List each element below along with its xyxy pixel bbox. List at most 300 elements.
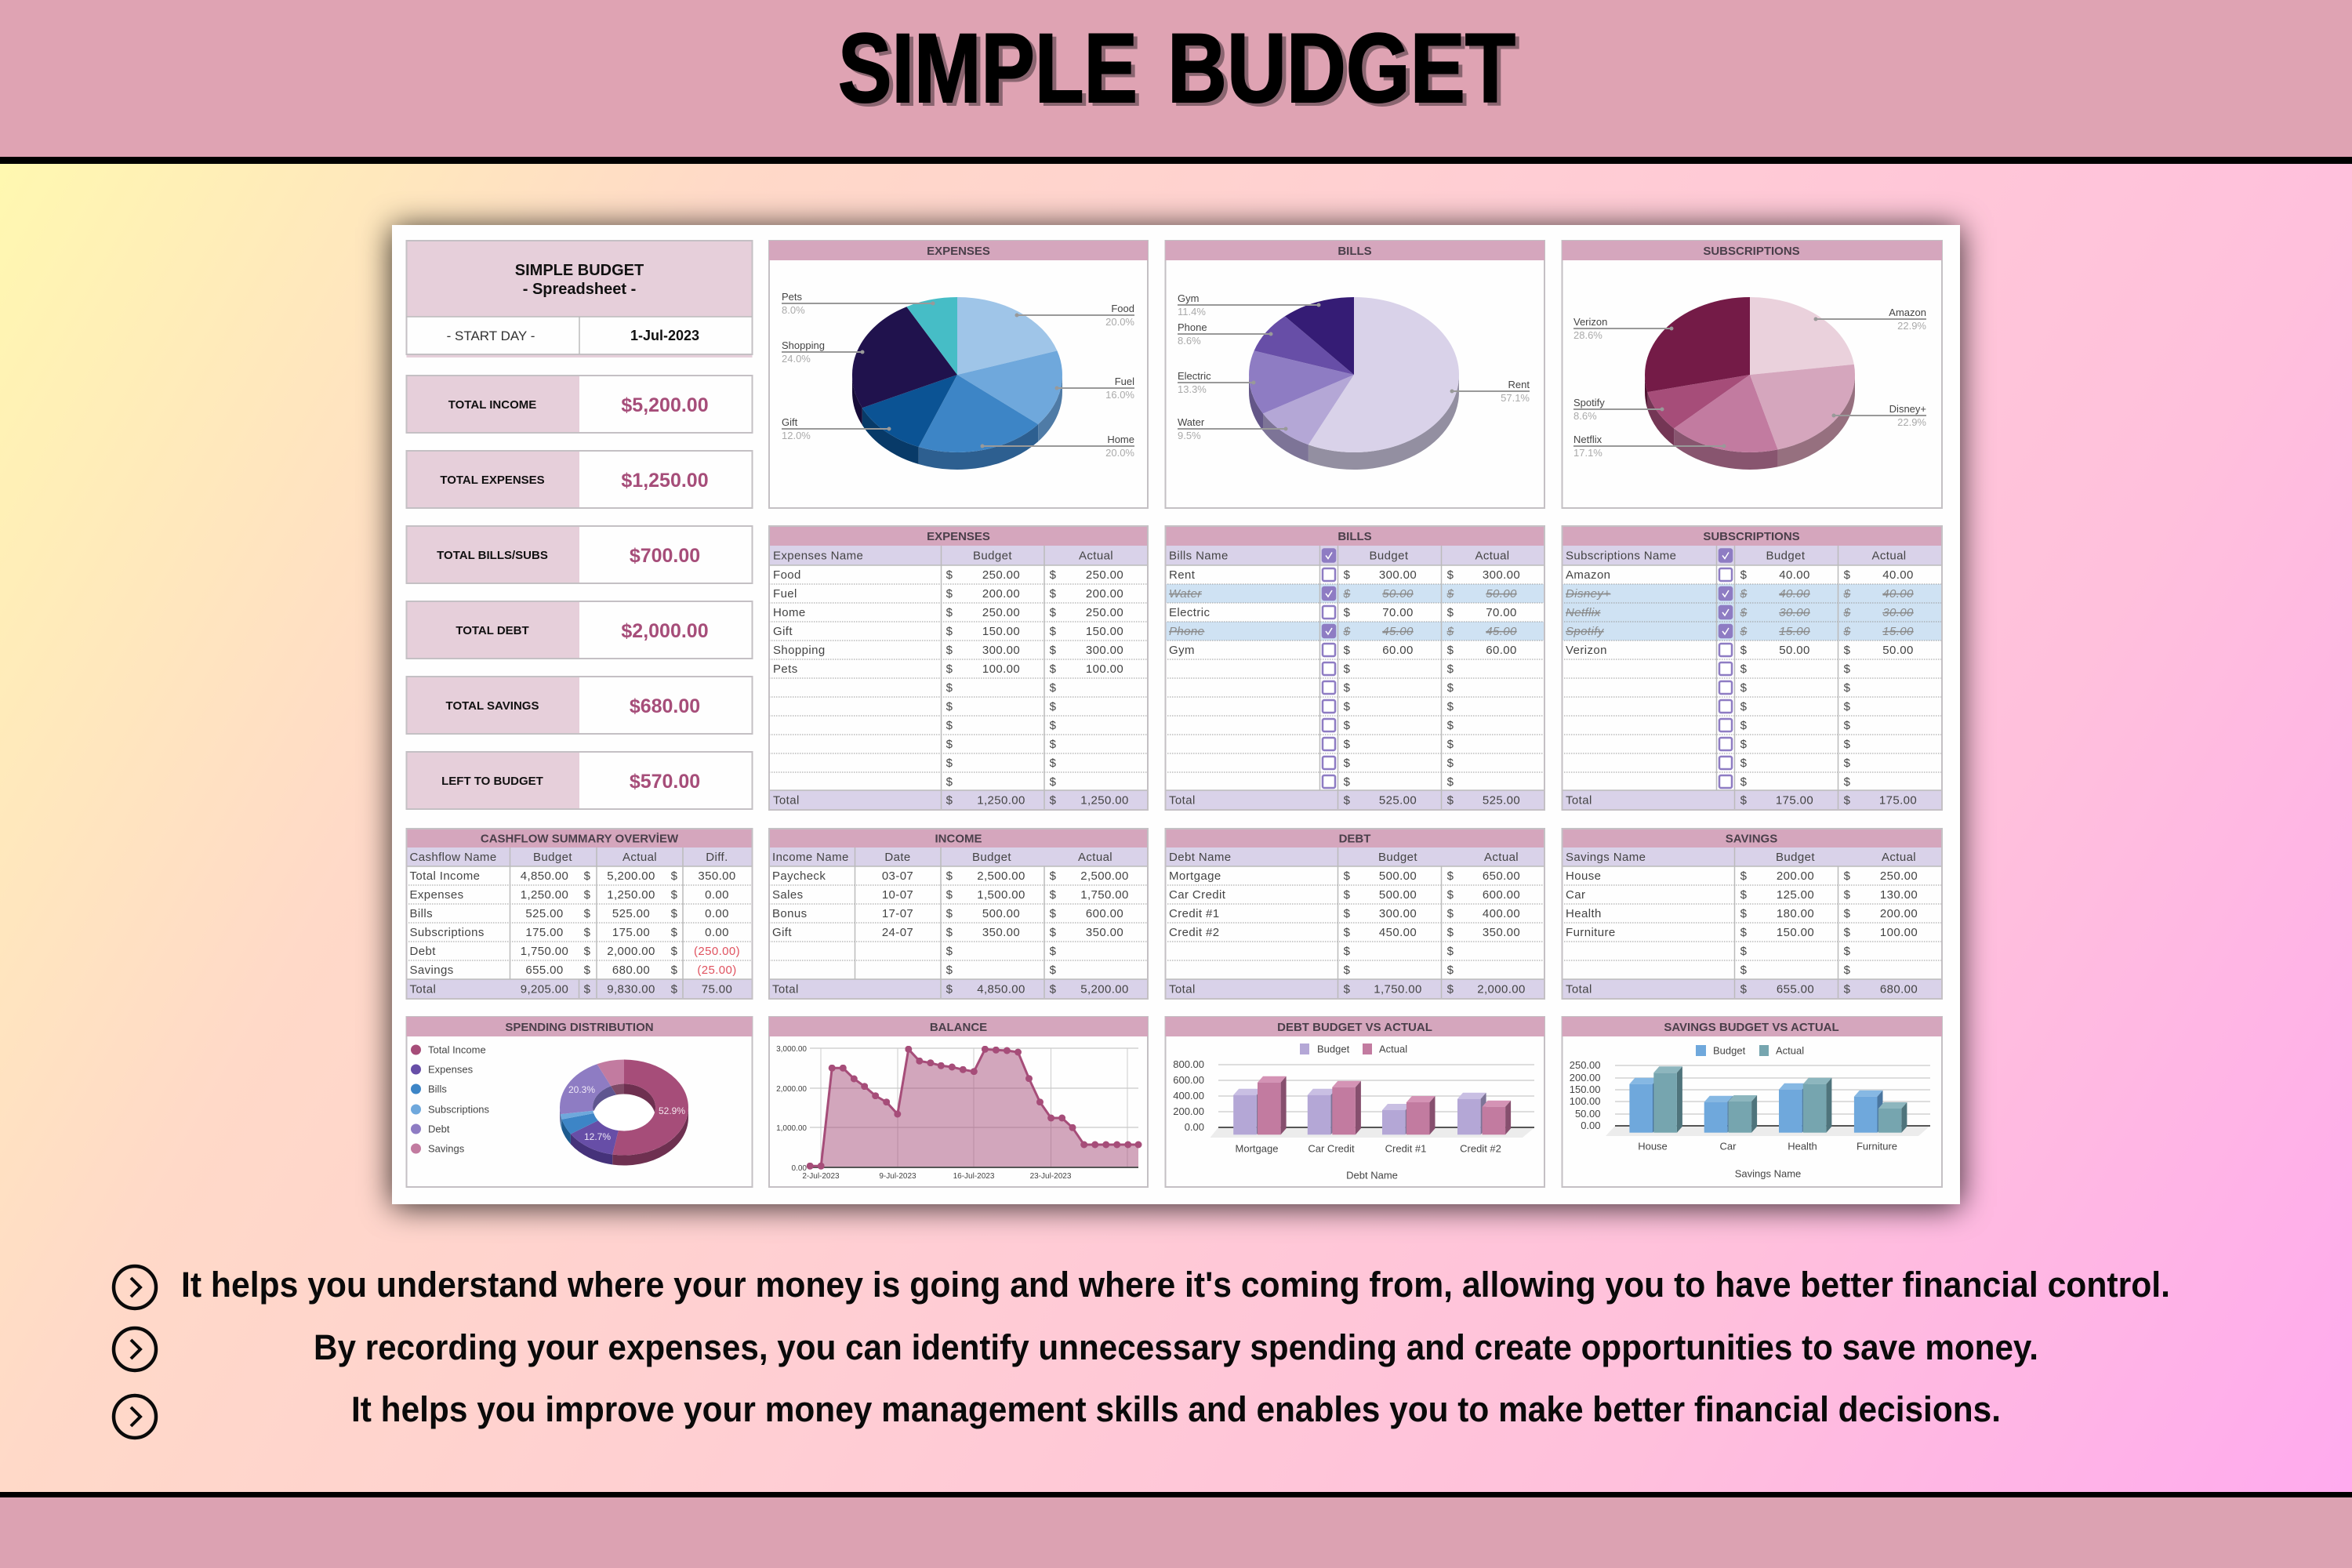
actual column: $: [1447, 681, 1454, 695]
budget column: $: [1344, 926, 1351, 939]
budget column: 1,750.00: [521, 945, 568, 958]
budget column: $: [1740, 926, 1748, 939]
area chart: [776, 1045, 1138, 1181]
actual column: [1446, 568, 1520, 808]
y axis and floor: 800.00: [1173, 1058, 1204, 1070]
column headers: [409, 851, 728, 864]
actual column: 2,000.00: [607, 945, 655, 958]
row names: Credit #2: [1169, 926, 1219, 939]
budget column: $: [946, 662, 953, 676]
row names: Netflix: [1566, 606, 1601, 619]
panel: KPI total bills and subs: [406, 526, 753, 583]
row names: Fuel: [773, 587, 797, 601]
area chart: 9-Jul-2023: [879, 1172, 916, 1181]
panel: spreadsheet title card: 1-Jul-2023: [630, 328, 699, 343]
actual column: $: [1446, 587, 1454, 601]
area chart: 1,000.00: [776, 1124, 807, 1133]
column headers: Actual: [1078, 851, 1112, 864]
pie labels: expenses: Food: [1111, 303, 1134, 314]
legend: Actual: [1776, 1044, 1804, 1057]
table: cashflow summary overview: CASHFLOW SUMMARY OVERVİEW: [481, 833, 679, 845]
difference column: 0.00: [705, 907, 729, 920]
actual column: $: [1844, 719, 1851, 732]
actual column: 250.00: [1086, 568, 1123, 582]
column headers: Subscriptions Name: [1566, 549, 1676, 563]
column headers: [1566, 549, 1907, 563]
category labels: House: [1638, 1140, 1668, 1152]
row names: Health: [1566, 907, 1602, 920]
budget column: 1,250.00: [977, 793, 1025, 808]
actual column: $: [1844, 983, 1851, 996]
budget column: $: [1740, 983, 1748, 996]
actual column: 400.00: [1483, 907, 1520, 920]
actual column: [1050, 568, 1129, 808]
actual column: $: [671, 869, 678, 883]
budget column: 150.00: [1777, 926, 1814, 939]
actual column: 70.00: [1486, 606, 1517, 619]
category labels: [1638, 1140, 1897, 1179]
budget column: $: [1740, 775, 1748, 789]
column headers: Bills Name: [1169, 549, 1229, 563]
actual column: $: [1844, 568, 1851, 582]
legend: Budget: [1317, 1043, 1350, 1055]
budget column: [946, 568, 1025, 808]
budget column: $: [1740, 625, 1748, 638]
budget column: $: [1344, 964, 1351, 977]
pie labels: bills: Water: [1178, 416, 1205, 428]
actual column: $: [1843, 625, 1851, 638]
actual column: 40.00: [1882, 568, 1914, 582]
y axis and floor: 200.00: [1173, 1105, 1204, 1117]
budget column: $: [584, 926, 591, 939]
category labels: Savings Name: [1735, 1168, 1801, 1179]
actual column: $: [1050, 775, 1057, 789]
budget column: $: [584, 869, 591, 883]
panel: bills pie chart: [1165, 241, 1544, 508]
actual column: $: [1050, 719, 1057, 732]
budget column: $: [1740, 606, 1748, 619]
budget column: $: [1740, 738, 1748, 751]
legend: [1696, 1044, 1804, 1057]
row names: Bills: [409, 907, 433, 920]
table: subscriptions: [1562, 526, 1942, 810]
row names and dates: [772, 869, 913, 996]
panel: KPI total income: $5,200.00: [621, 394, 709, 416]
difference column: 350.00: [698, 869, 736, 883]
actual column: 350.00: [1086, 926, 1123, 939]
budget column: 500.00: [1379, 888, 1417, 902]
actual column: $: [671, 888, 678, 902]
budget column: $: [1740, 568, 1748, 582]
panel: spending distribution donut: [406, 1017, 753, 1187]
actual column: 50.00: [1486, 587, 1517, 601]
actual column: 525.00: [1483, 793, 1520, 808]
category labels: Credit #1: [1385, 1143, 1426, 1154]
budget column: 15.00: [1779, 625, 1810, 638]
category labels: Furniture: [1857, 1140, 1897, 1152]
column headers: Savings Name: [1566, 851, 1646, 864]
row names: Food: [773, 568, 801, 582]
budget column: $: [946, 738, 953, 751]
row names: Rent: [1169, 568, 1196, 582]
budget column: 40.00: [1779, 568, 1810, 582]
budget column: $: [1740, 719, 1748, 732]
pie labels: subscriptions: 28.6%: [1573, 329, 1602, 341]
actual column: 250.00: [1880, 869, 1918, 883]
category labels: [1236, 1143, 1501, 1181]
budget column: 175.00: [525, 926, 564, 939]
pie labels: subscriptions: 17.1%: [1573, 447, 1602, 459]
budget column: $: [1740, 757, 1748, 770]
actual column: 300.00: [1483, 568, 1520, 582]
panel: KPI left to budget: LEFT TO BUDGET: [441, 775, 543, 788]
pie labels: subscriptions: 8.6%: [1573, 410, 1597, 422]
row names: Total: [773, 793, 800, 808]
title: [838, 14, 1519, 126]
actual column: $: [1050, 793, 1057, 808]
budget column: $: [946, 700, 953, 713]
budget column: $: [584, 907, 591, 920]
actual column: 1,250.00: [607, 888, 655, 902]
budget column: $: [946, 926, 953, 939]
pie labels: bills: Gym: [1178, 292, 1199, 304]
actual column: 175.00: [612, 926, 650, 939]
legend: Savings: [428, 1143, 465, 1154]
panel: KPI total expenses: $1,250.00: [621, 470, 709, 492]
row names: [1169, 869, 1226, 996]
actual column: $: [1446, 625, 1454, 638]
y axis and floor: 100.00: [1570, 1095, 1601, 1107]
actual column: 2,500.00: [1080, 869, 1129, 883]
budget column: 1,500.00: [977, 888, 1025, 902]
actual column: $: [1447, 907, 1454, 920]
actual column: 130.00: [1880, 888, 1918, 902]
pie labels: bills: [1178, 292, 1530, 441]
budget column: 200.00: [1777, 869, 1814, 883]
budget column: $: [1344, 888, 1351, 902]
budget column: $: [946, 983, 953, 996]
actual column: $: [1447, 644, 1454, 657]
column headers: [1566, 851, 1916, 864]
actual column: $: [1447, 568, 1454, 582]
budget column: 655.00: [1777, 983, 1814, 996]
legend: Total Income: [428, 1044, 486, 1055]
column headers: [772, 851, 1112, 864]
budget column: $: [1740, 587, 1748, 601]
budget column: 300.00: [982, 644, 1020, 657]
actual column: 200.00: [1086, 587, 1123, 601]
budget column: 1,750.00: [1374, 983, 1422, 996]
actual column: [1844, 869, 1918, 996]
actual column: 30.00: [1882, 606, 1914, 619]
actual column: [607, 869, 678, 996]
donut chart: 12.7%: [584, 1131, 611, 1142]
pie labels: subscriptions: Amazon: [1889, 307, 1926, 318]
row names: Phone: [1169, 625, 1204, 638]
row names: Electric: [1169, 606, 1210, 619]
budget column: $: [1740, 644, 1748, 657]
actual column: $: [1844, 644, 1851, 657]
pie labels: expenses: Home: [1107, 434, 1134, 445]
actual column: $: [1050, 681, 1057, 695]
pie labels: expenses: 8.0%: [782, 304, 805, 316]
actual column: 680.00: [612, 964, 650, 977]
actual column: $: [1050, 757, 1057, 770]
actual column: $: [1844, 945, 1851, 958]
row names: Mortgage: [1169, 869, 1221, 883]
bars: [1233, 1076, 1511, 1134]
actual column: $: [1050, 964, 1057, 977]
pie labels: bills: 13.3%: [1178, 383, 1207, 395]
actual column: $: [1050, 700, 1057, 713]
difference column: 0.00: [705, 888, 729, 902]
actual column: 175.00: [1879, 793, 1917, 808]
panel: KPI total expenses: [406, 451, 753, 508]
budget column: [1344, 869, 1422, 996]
actual column: $: [1447, 945, 1454, 958]
category labels: Mortgage: [1236, 1143, 1278, 1154]
actual column: $: [1050, 888, 1057, 902]
legend: Expenses: [428, 1063, 474, 1076]
budget column: $: [1740, 793, 1748, 808]
column headers: [1169, 851, 1519, 864]
panel: KPI total income: [406, 376, 753, 433]
panel: debt budget vs actual bar chart: [1165, 1017, 1544, 1187]
table: bills: [1165, 526, 1544, 810]
column headers: Diff.: [706, 851, 728, 864]
budget column: $: [946, 606, 953, 619]
actual column: 350.00: [1483, 926, 1520, 939]
actual column: $: [671, 964, 678, 977]
actual column: $: [671, 945, 678, 958]
actual column: $: [1050, 662, 1057, 676]
pie: expenses 3D slices: [852, 297, 1062, 470]
budget column: $: [1344, 793, 1351, 808]
y axis and floor: 250.00: [1570, 1059, 1601, 1071]
budget column: 50.00: [1779, 644, 1810, 657]
budget column: 655.00: [525, 964, 564, 977]
budget column: 525.00: [525, 907, 564, 920]
budget column: $: [946, 775, 953, 789]
column headers: Actual: [1475, 549, 1510, 563]
panel: subscriptions pie chart: SUBSCRIPTIONS: [1703, 245, 1800, 258]
actual column: $: [1447, 869, 1454, 883]
actual column: 40.00: [1882, 587, 1914, 601]
icon: arrow circle 1: [114, 1266, 156, 1308]
row names: Water: [1169, 587, 1202, 601]
spreadsheet sheet: [392, 225, 1960, 1204]
y axis and floor: 600.00: [1173, 1074, 1204, 1086]
actual column: $: [1844, 757, 1851, 770]
panel: expenses pie chart: [769, 241, 1148, 508]
column headers: Date: [884, 851, 911, 864]
bullet text 1: It helps you understand where your money is going and where it's coming from, allowing you to have better financial control.: [181, 1265, 2170, 1305]
actual column: $: [1050, 625, 1057, 638]
difference column: (250.00): [694, 945, 740, 958]
pie labels: expenses: 24.0%: [782, 353, 811, 365]
actual column: 250.00: [1086, 606, 1123, 619]
column headers: Budget: [973, 549, 1012, 563]
actual column: [1843, 568, 1917, 808]
panel: KPI total savings: [406, 677, 753, 734]
header band: [0, 0, 2352, 164]
actual column: $: [1447, 793, 1454, 808]
column headers: Cashflow Name: [409, 851, 497, 864]
budget column: 500.00: [1379, 869, 1417, 883]
budget column: $: [946, 719, 953, 732]
panel: KPI total debt: [406, 601, 753, 659]
pie labels: subscriptions: 22.9%: [1897, 320, 1926, 332]
actual column: $: [671, 926, 678, 939]
actual column: $: [1844, 964, 1851, 977]
panel: balance area chart: [769, 1017, 1148, 1187]
y axis and floor: 400.00: [1173, 1090, 1204, 1102]
table: expenses: [769, 526, 1148, 810]
y axis and floor: [1173, 1058, 1535, 1138]
column headers: Actual: [1079, 549, 1113, 563]
legend: Bills: [428, 1083, 447, 1094]
row names: Furniture: [1566, 926, 1616, 939]
row names: Car: [1566, 888, 1585, 902]
budget column: $: [1344, 757, 1351, 770]
legend: Subscriptions: [428, 1104, 490, 1115]
actual column: $: [1844, 926, 1851, 939]
bullet text 3: It helps you improve your money management skills and enables you to make better financial decisions.: [351, 1389, 2001, 1429]
panel: KPI total savings: $680.00: [630, 695, 700, 717]
actual column: $: [1447, 983, 1454, 996]
budget column: [1740, 568, 1813, 808]
row names: Home: [773, 606, 806, 619]
panel: debt budget vs actual bar chart: DEBT BUDGET VS ACTUAL: [1277, 1021, 1432, 1034]
budget column: 300.00: [1379, 568, 1417, 582]
pie labels: subscriptions: [1573, 307, 1926, 459]
row names and dates: Bonus: [772, 907, 808, 920]
budget column: 9,205.00: [521, 983, 568, 996]
actual column: $: [671, 907, 678, 920]
budget column: 200.00: [982, 587, 1020, 601]
category labels: Credit #2: [1460, 1143, 1501, 1154]
bullet text 2: By recording your expenses, you can identify unnecessary spending and create opportunities to save money.: [314, 1327, 2038, 1367]
table: subscriptions: SUBSCRIPTIONS: [1703, 530, 1800, 543]
pie: bills 3D slices: [1249, 297, 1459, 470]
actual column: 650.00: [1483, 869, 1520, 883]
pie labels: expenses: [782, 291, 1134, 459]
budget column: $: [946, 644, 953, 657]
actual column: 200.00: [1880, 907, 1918, 920]
actual column: 525.00: [612, 907, 650, 920]
category labels: Car Credit: [1308, 1143, 1355, 1154]
pie labels: bills: 11.4%: [1178, 306, 1206, 318]
panel: KPI total bills and subs: $700.00: [630, 545, 700, 567]
panel: expenses pie chart: EXPENSES: [927, 245, 990, 258]
budget column: $: [1344, 983, 1351, 996]
budget column: $: [946, 681, 953, 695]
budget column: 4,850.00: [521, 869, 568, 883]
pie labels: bills: Phone: [1178, 321, 1207, 333]
pie labels: expenses: 16.0%: [1105, 389, 1134, 401]
budget column: $: [1740, 945, 1748, 958]
actual column: $: [1050, 983, 1057, 996]
pie labels: expenses: Fuel: [1115, 376, 1134, 387]
budget column: 1,250.00: [521, 888, 568, 902]
budget column: $: [946, 907, 953, 920]
pie labels: subscriptions: Verizon: [1573, 316, 1607, 328]
category labels: Debt Name: [1346, 1170, 1398, 1181]
budget column: [1343, 568, 1417, 808]
budget column: $: [1344, 662, 1351, 676]
actual column: $: [1050, 945, 1057, 958]
row names: [773, 568, 826, 808]
panel: spreadsheet title card: [406, 241, 753, 358]
actual column: $: [1447, 662, 1454, 676]
pie labels: subscriptions: Spotify: [1573, 397, 1605, 408]
row names and dates: Paycheck: [772, 869, 826, 883]
actual column: $: [1447, 738, 1454, 751]
legend: Debt: [428, 1123, 450, 1135]
pie labels: subscriptions: Netflix: [1573, 434, 1602, 445]
budget column: 500.00: [982, 907, 1020, 920]
panel: KPI total savings: TOTAL SAVINGS: [446, 699, 539, 713]
budget column: $: [946, 793, 953, 808]
budget column: $: [584, 945, 591, 958]
difference column: 75.00: [702, 983, 732, 996]
actual column: $: [1447, 888, 1454, 902]
budget column: $: [1344, 738, 1351, 751]
category labels: Car: [1720, 1140, 1737, 1152]
title: BUDGET: [1171, 17, 1519, 126]
difference column: 0.00: [705, 926, 729, 939]
budget column: 300.00: [1379, 907, 1417, 920]
actual column: 680.00: [1880, 983, 1918, 996]
actual column: $: [1844, 907, 1851, 920]
actual column: $: [1844, 888, 1851, 902]
y axis and floor: 150.00: [1570, 1083, 1601, 1095]
pie labels: bills: 57.1%: [1501, 392, 1530, 404]
actual column: 1,250.00: [1080, 793, 1129, 808]
budget column: $: [1344, 719, 1351, 732]
icon: arrow circle 2: [114, 1328, 156, 1370]
column headers: Budget: [1776, 851, 1815, 864]
column headers: Budget: [533, 851, 572, 864]
row names: Total: [1169, 793, 1196, 808]
column headers: Budget: [1370, 549, 1409, 563]
panel: spreadsheet title card: SIMPLE BUDGET: [515, 262, 644, 279]
budget column: 125.00: [1777, 888, 1814, 902]
actual column: $: [1844, 662, 1851, 676]
y axis and floor: 0.00: [1581, 1120, 1601, 1131]
row names and dates: 10-07: [882, 888, 913, 902]
column headers: Actual: [622, 851, 657, 864]
actual column: $: [1447, 757, 1454, 770]
budget column: $: [1740, 907, 1748, 920]
row names: Credit #1: [1169, 907, 1219, 920]
budget column: 4,850.00: [977, 983, 1025, 996]
pie labels: bills: Electric: [1178, 370, 1211, 382]
budget column: $: [1344, 644, 1351, 657]
area chart: 3,000.00: [776, 1045, 807, 1054]
pie labels: subscriptions: Disney+: [1889, 403, 1926, 415]
title: SIMPLE: [838, 14, 1138, 123]
actual column: 9,830.00: [607, 983, 655, 996]
budget column: $: [946, 587, 953, 601]
y axis and floor: [1570, 1059, 1930, 1136]
row names: [1566, 568, 1610, 808]
budget column: 60.00: [1382, 644, 1414, 657]
panel: spreadsheet title card: - Spreadsheet -: [523, 281, 636, 298]
budget column: [521, 869, 591, 996]
y axis and floor: 50.00: [1575, 1108, 1601, 1120]
budget column: $: [584, 983, 591, 996]
